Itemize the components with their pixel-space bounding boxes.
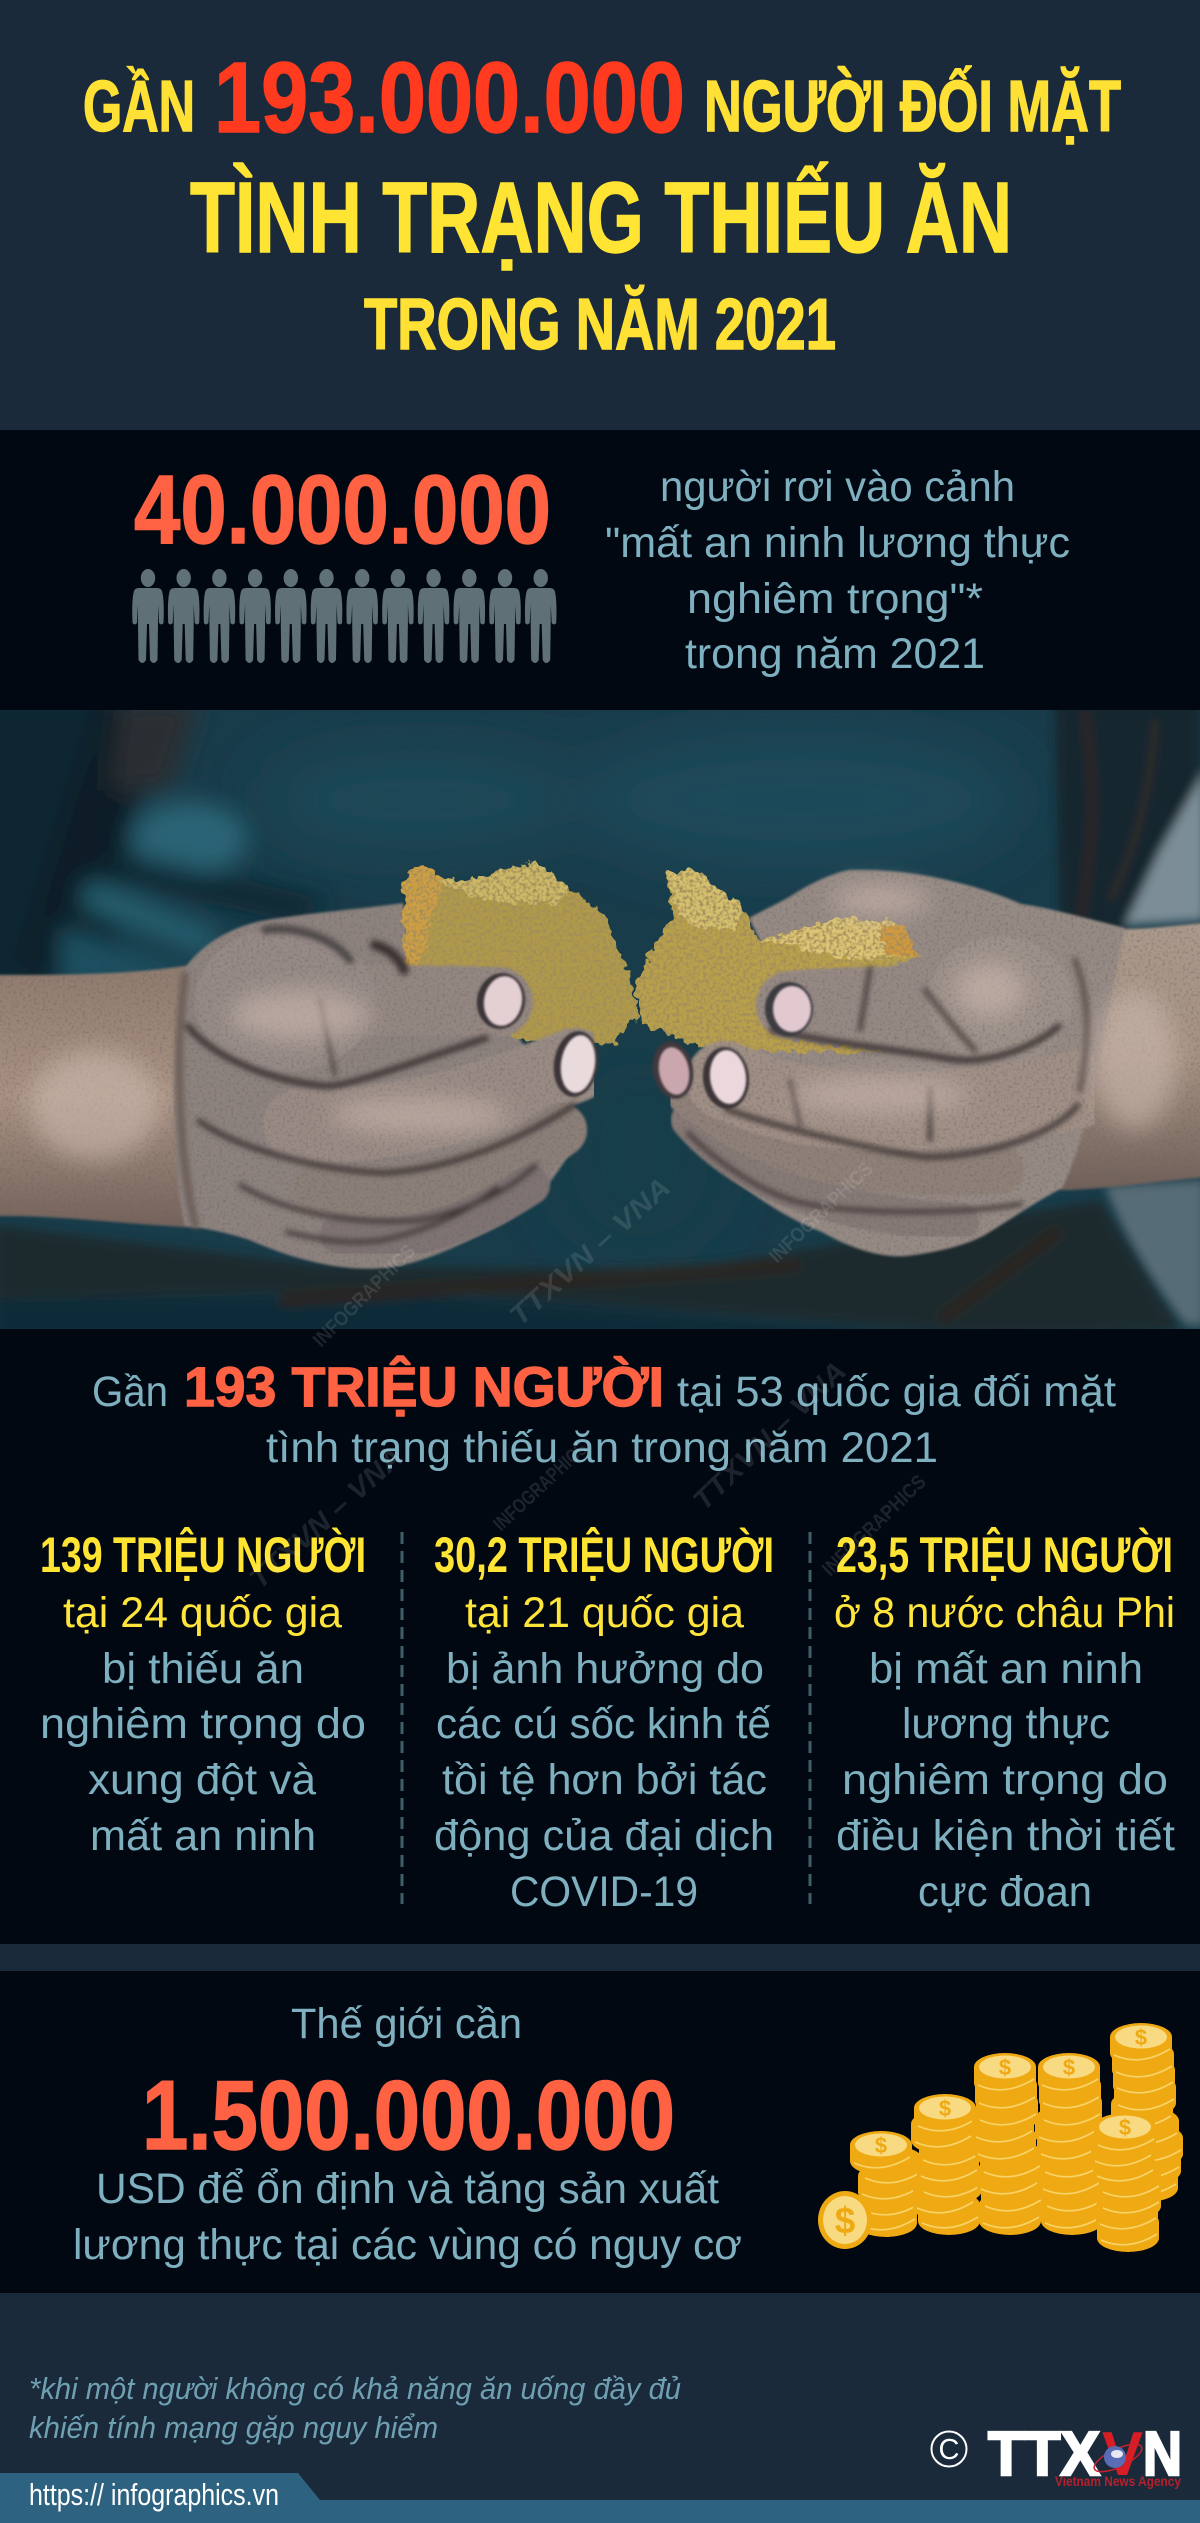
title bbox=[83, 42, 1121, 365]
text: severe food insecurity description: nghiêm trọng"* bbox=[687, 575, 983, 623]
watermarks: TTXVN – VNA bbox=[503, 1171, 676, 1331]
fingernails bbox=[473, 969, 813, 1111]
text: severe food insecurity description: người rơi vào cảnh bbox=[660, 463, 1015, 511]
column: 30.2 million: tại 21 quốc gia bbox=[465, 1589, 744, 1637]
column: 23.5 million: lương thực bbox=[902, 1700, 1110, 1748]
title: 193.000.000 bbox=[214, 42, 685, 154]
right hand fingers bbox=[690, 936, 1075, 1222]
heading: 193 million: tại 53 quốc gia đối mặt bbox=[677, 1368, 1116, 1416]
column: 23.5 million: bị mất an ninh bbox=[869, 1645, 1143, 1693]
icon: stacks of gold coins bbox=[818, 2023, 1183, 2252]
logo: TTXVN copyright: TTX bbox=[988, 2420, 1100, 2489]
column: 139 million: tại 24 quốc gia bbox=[63, 1589, 342, 1637]
column: 30.2 million: tồi tệ hơn bởi tác bbox=[442, 1756, 767, 1804]
watermarks: INFOGRAPHICS bbox=[765, 1158, 878, 1268]
footnote: *khi một người không có khả năng ăn uống đầy đủ bbox=[29, 2371, 681, 2406]
panel: world needs 1.5 billion USD bbox=[0, 1971, 1200, 2293]
column: 139 million: mất an ninh bbox=[90, 1812, 316, 1860]
icon: stacks of gold coins: $ bbox=[1063, 2055, 1075, 2080]
column: 30.2 million bbox=[434, 1527, 774, 1916]
column: 23.5 million: nghiêm trọng do bbox=[842, 1756, 1168, 1804]
text: funding need: Thế giới cần bbox=[291, 2000, 522, 2048]
icon: stacks of gold coins: $ bbox=[1135, 2025, 1147, 2050]
column: 139 million bbox=[40, 1527, 366, 1860]
hand highlights bbox=[30, 884, 1177, 1160]
footnote: khiến tính mạng gặp nguy hiểm bbox=[29, 2410, 438, 2445]
column: 23.5 million bbox=[834, 1527, 1175, 1916]
watermarks: TTXVN – VNA bbox=[243, 1441, 409, 1594]
column: 30.2 million: các cú sốc kinh tế bbox=[436, 1700, 771, 1748]
big number: 40.000.000: 40.000.000 bbox=[134, 455, 551, 564]
bread: left piece bbox=[402, 862, 639, 1045]
column: 30.2 million: động của đại dịch bbox=[434, 1812, 774, 1860]
photo: dirty hands breaking bread bbox=[0, 690, 1200, 1340]
text: funding need: lương thực tại các vùng có nguy cơ bbox=[73, 2221, 742, 2269]
bread: right piece bbox=[635, 870, 918, 1053]
icon: copyright bbox=[932, 2432, 966, 2466]
watermarks: INFOGRAPHICS bbox=[489, 1438, 592, 1536]
column: 139 million: 139 TRIỆU NGƯỜI bbox=[40, 1527, 366, 1583]
icon: copyright: C bbox=[939, 2434, 959, 2466]
icon: row of twelve people bbox=[132, 569, 556, 663]
icon: stacks of gold coins: $ bbox=[1119, 2115, 1131, 2140]
panel: 40 million people bbox=[0, 430, 1200, 710]
heading: 193 million: 193 TRIỆU NGƯỜI bbox=[184, 1355, 664, 1418]
watermarks bbox=[243, 1158, 931, 1594]
column: 30.2 million: COVID-19 bbox=[510, 1868, 698, 1916]
column: 139 million: xung đột và bbox=[88, 1756, 316, 1804]
text: severe food insecurity description bbox=[605, 463, 1070, 678]
icon: stacks of gold coins: $ bbox=[835, 2200, 856, 2241]
logo: TTXVN copyright bbox=[932, 2420, 1182, 2489]
title: TRONG NĂM 2021 bbox=[364, 285, 836, 365]
column: 139 million: nghiêm trọng do bbox=[40, 1700, 366, 1748]
heading: 193 million: Gần bbox=[92, 1368, 168, 1416]
column: 23.5 million: cực đoan bbox=[918, 1868, 1092, 1916]
watermarks: TTXVN – VNA bbox=[687, 1355, 852, 1516]
column: 30.2 million: bị ảnh hưởng do bbox=[446, 1645, 764, 1693]
footer strip with website tab: https:// infographics.vn bbox=[29, 2477, 279, 2512]
logo: TTXVN copyright: Vietnam News Agency bbox=[1055, 2473, 1181, 2489]
text: severe food insecurity description: trong năm 2021 bbox=[685, 630, 985, 678]
icon: stacks of gold coins: $ bbox=[939, 2096, 951, 2121]
text: severe food insecurity description: "mất an ninh lương thực bbox=[605, 519, 1070, 567]
right arm and back of hand bbox=[718, 870, 1200, 1256]
hand creases and shading bbox=[179, 929, 1087, 1242]
column: 30.2 million: 30,2 TRIỆU NGƯỜI bbox=[434, 1527, 774, 1583]
icon: stacks of gold coins: $ bbox=[875, 2133, 887, 2158]
left arm and back of hand bbox=[0, 903, 574, 1269]
watermarks: INFOGRAPHICS bbox=[309, 1241, 420, 1352]
title: GẦN bbox=[83, 66, 195, 147]
text: funding need: 1.500.000.000 bbox=[142, 2060, 675, 2170]
footnote bbox=[29, 2371, 681, 2445]
footer strip with website tab bbox=[0, 2473, 1200, 2523]
logo: TTXVN copyright: N bbox=[1143, 2420, 1182, 2489]
panel: 193 million people in 53 countries bbox=[0, 1329, 1200, 1944]
heading: 193 million: tình trạng thiếu ăn trong năm 2021 bbox=[266, 1424, 938, 1472]
column: 139 million: bị thiếu ăn bbox=[102, 1645, 304, 1693]
logo: TTXVN copyright: V bbox=[1102, 2420, 1143, 2489]
text: funding need: USD để ổn định và tăng sản xuất bbox=[96, 2165, 719, 2213]
left hand fingers bbox=[195, 928, 575, 1238]
column: 23.5 million: ở 8 nước châu Phi bbox=[834, 1589, 1175, 1637]
watermarks: INFOGRAPHICS bbox=[818, 1471, 931, 1581]
heading: 193 million bbox=[92, 1355, 1116, 1472]
column: 23.5 million: điều kiện thời tiết bbox=[836, 1812, 1175, 1860]
icon: stacks of gold coins: $ bbox=[999, 2055, 1011, 2080]
text: funding need bbox=[73, 2000, 742, 2269]
